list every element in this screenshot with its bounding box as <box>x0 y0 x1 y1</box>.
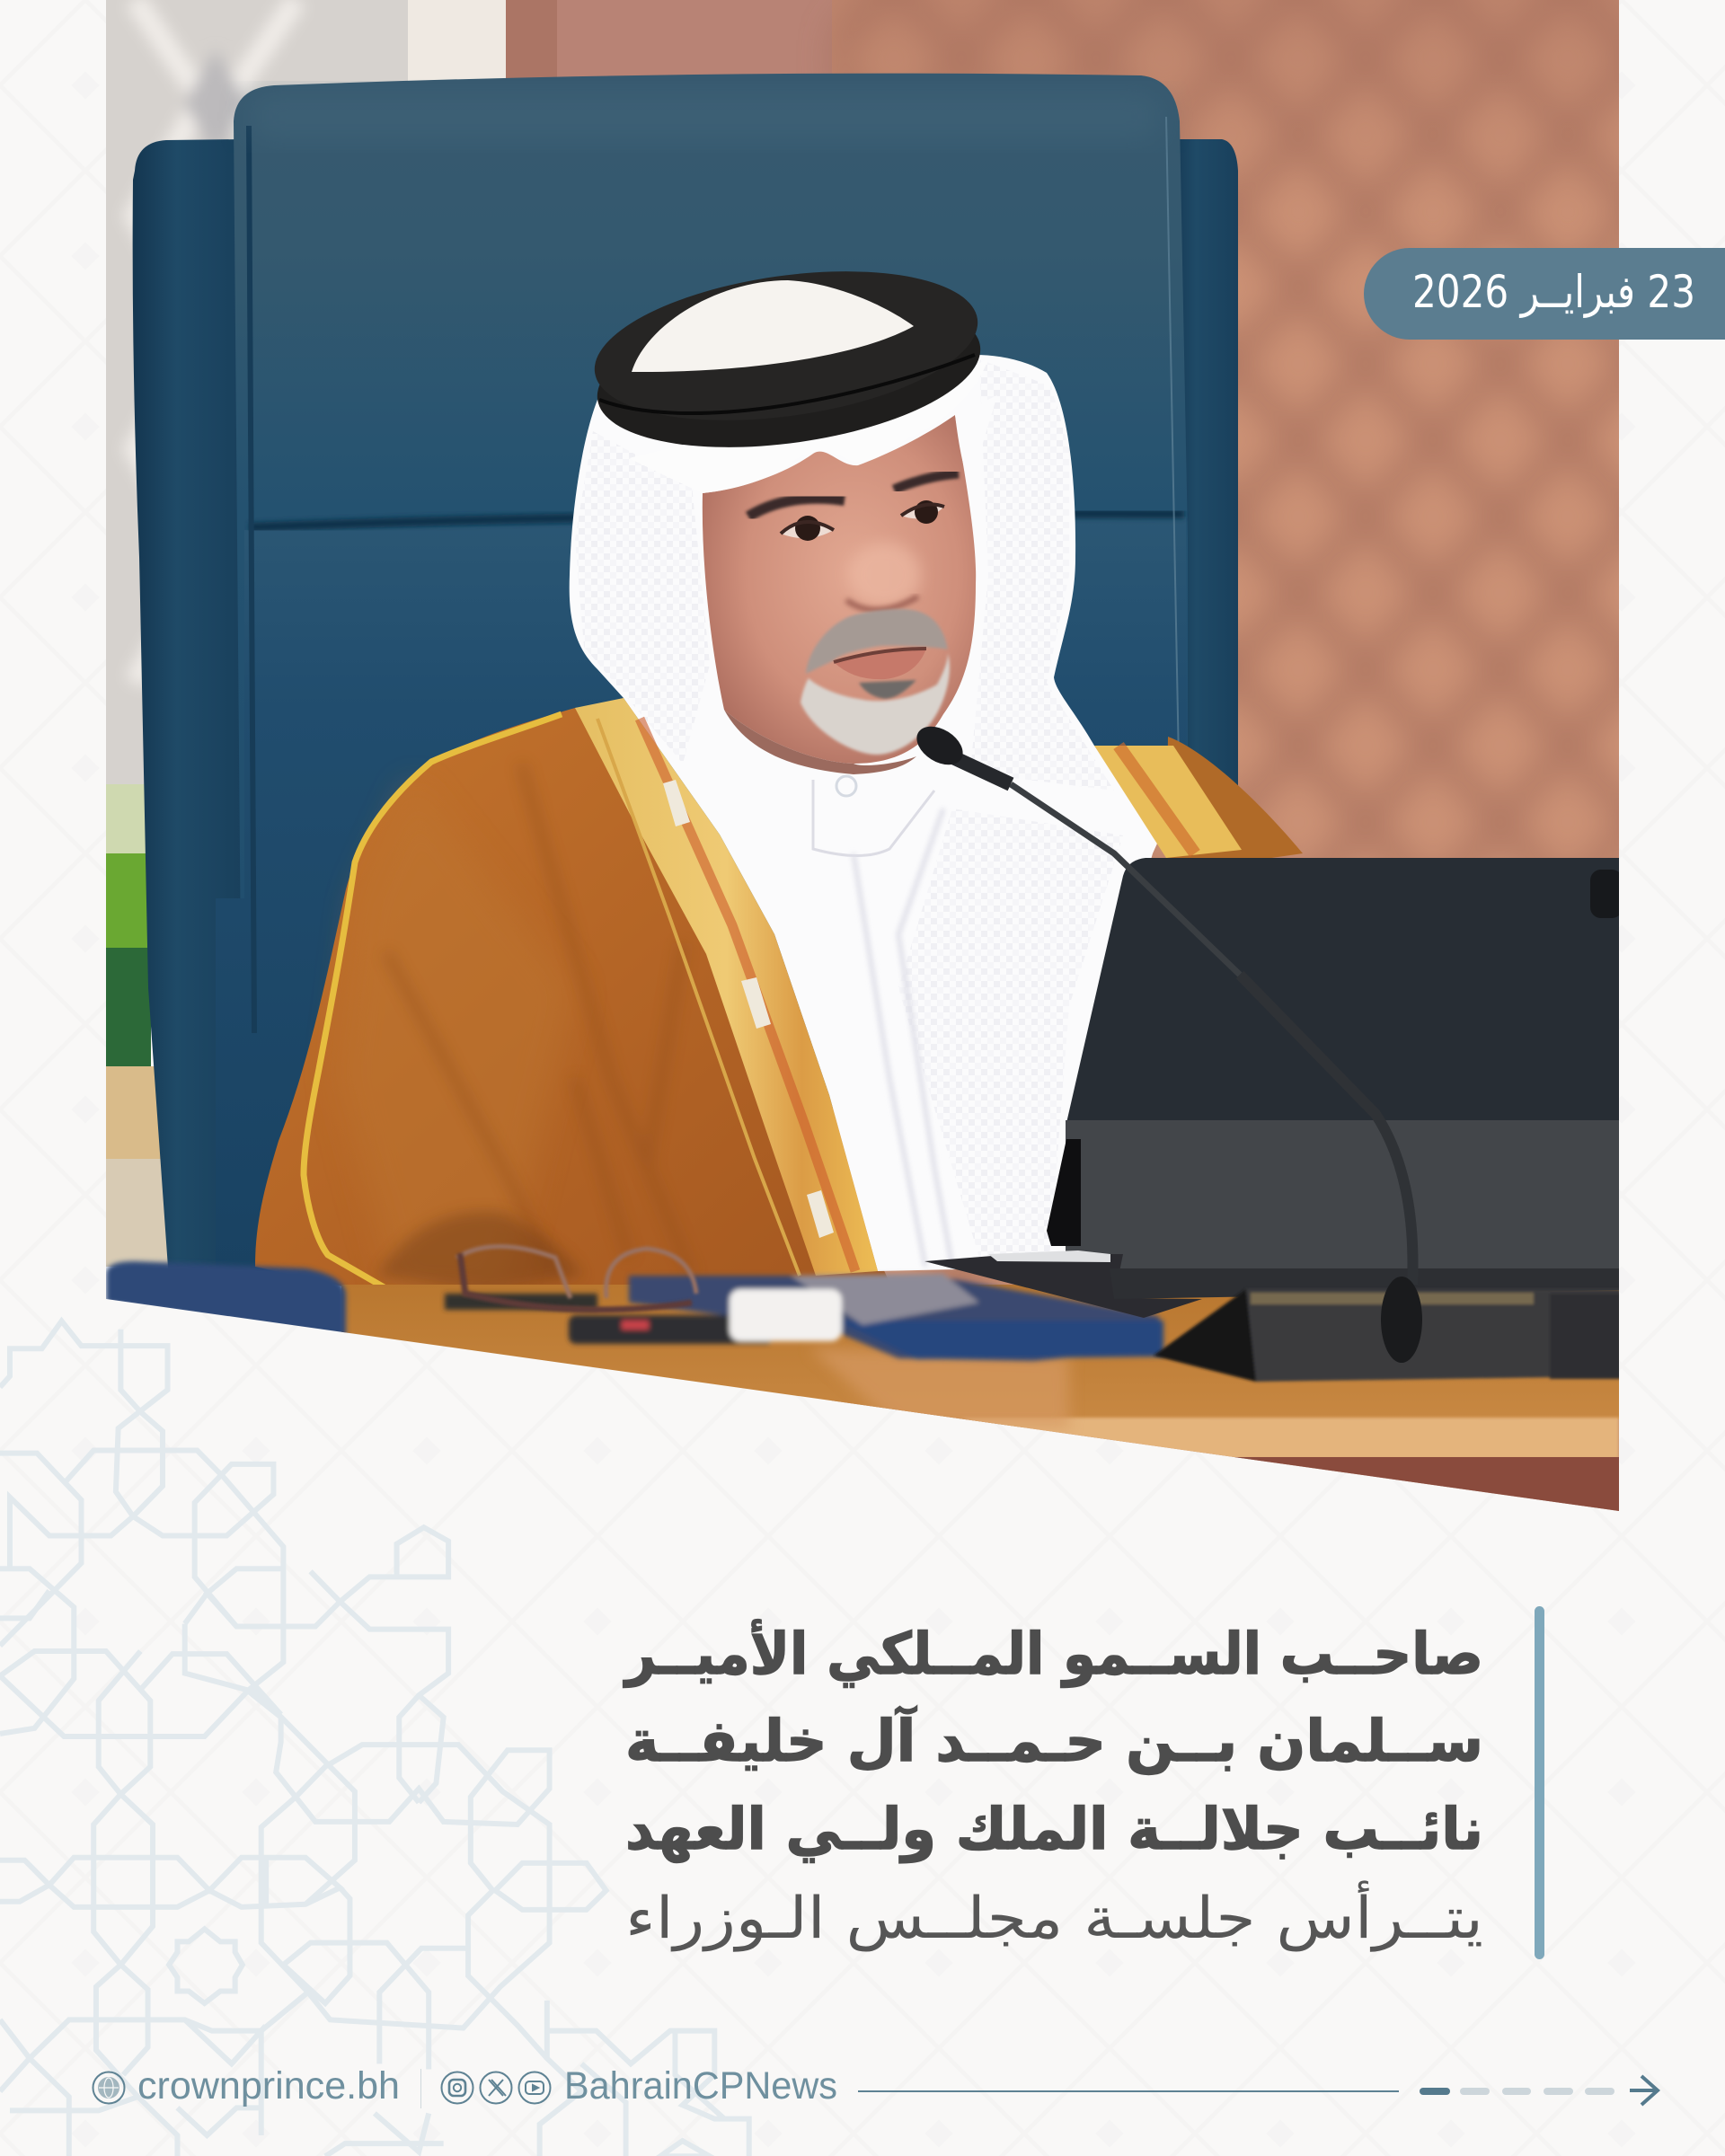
date badge <box>1364 248 1725 340</box>
gold trim left <box>575 698 878 1276</box>
chair <box>133 74 1238 1280</box>
footer website: crownprince.bh <box>137 2064 400 2107</box>
microphone <box>910 719 1422 1363</box>
date badge: 23 فبرايــر 2026 <box>1412 266 1695 318</box>
table <box>341 1285 1619 1527</box>
title block: ســلمان بــن حـمــد آل خليفــة <box>625 1705 1483 1775</box>
title block: صاحــب الســمو المــلكي الأميــر <box>623 1619 1483 1688</box>
title block <box>623 1619 1483 1952</box>
icon: youtube <box>519 2072 550 2104</box>
glasses <box>456 1247 696 1310</box>
robe left <box>255 701 898 1303</box>
gold trim right <box>1094 746 1242 858</box>
icon: instagram <box>442 2072 473 2104</box>
footer social handle <box>442 2064 837 2107</box>
footer social handle: BahrainCPNews <box>564 2064 837 2107</box>
geometric pattern decoration <box>0 1321 749 2156</box>
lower agal ring <box>597 334 981 447</box>
gold cord <box>304 714 562 1303</box>
white garment <box>570 355 1161 1271</box>
wall background <box>106 0 1659 1563</box>
photo: Crown Prince at cabinet session <box>106 0 1659 1563</box>
microphone base <box>1154 1289 1622 1382</box>
desk items <box>106 1261 1163 1361</box>
face <box>703 415 976 774</box>
icon: globe <box>93 2072 124 2104</box>
tablet <box>924 858 1626 1318</box>
title block: يتــرأس جلسـة مجلــس الـوزراء <box>625 1880 1483 1952</box>
footer line <box>858 2090 1399 2092</box>
accent bar <box>1535 1606 1544 1959</box>
headdress <box>595 271 997 493</box>
pagination dashes <box>1420 2088 1614 2095</box>
arrow <box>1630 2076 1658 2105</box>
footer divider <box>420 2069 421 2108</box>
icon: X <box>480 2072 512 2104</box>
robe right <box>1166 737 1303 862</box>
title block: نائــب جلالــة الملك ولــي العهد <box>625 1797 1483 1863</box>
